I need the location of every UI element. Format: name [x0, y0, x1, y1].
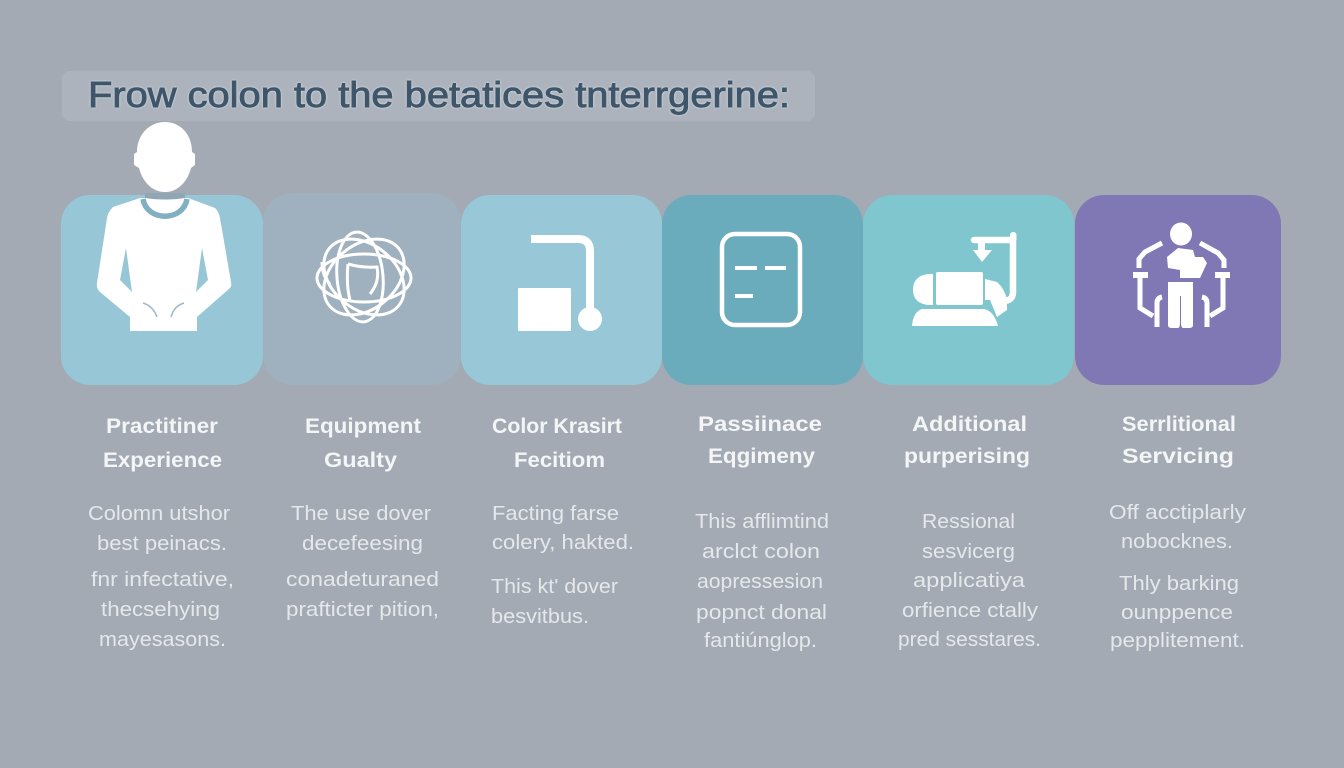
- text block: column 6 body: ounppence: [1121, 601, 1233, 624]
- icon: tube and box: [518, 239, 602, 331]
- text block: column 1 heading: [103, 414, 222, 472]
- text block: column 2 body: [286, 502, 439, 621]
- text block: column 1 body: Colomn utshor: [88, 502, 230, 525]
- card 1: [61, 195, 263, 385]
- card 6: [1075, 195, 1281, 385]
- text block: column 4 heading: Passiinace: [698, 412, 822, 436]
- panel: equipment quality: [263, 193, 461, 385]
- text block: column 4 heading: [698, 412, 822, 468]
- text block: column 3 body: Facting farse: [492, 502, 619, 525]
- text block: column 3 heading: Fecitiom: [514, 448, 605, 472]
- text block: column 2 body: decefeesing: [302, 532, 423, 555]
- text block: column 4 body: This afflimtind: [695, 510, 829, 533]
- text block: column 1 body: best peinacs.: [97, 532, 227, 555]
- title: [62, 71, 815, 121]
- panel: additional purperising: [863, 195, 1074, 385]
- icon: person with brackets: [1133, 222, 1230, 328]
- icon: tablet: [722, 234, 800, 325]
- card 3: [461, 195, 662, 385]
- text block: column 4 body: fantiúnglop.: [704, 629, 817, 652]
- text block: column 2 heading: Gualty: [324, 448, 397, 472]
- text block: column 6 body: Thly barking: [1119, 572, 1239, 595]
- text block: column 4 heading: Eqgimeny: [708, 444, 815, 468]
- text block: column 1 body: mayesasons.: [99, 628, 226, 651]
- panel: practitioner experience: [61, 122, 263, 385]
- text block: column 5 heading: Additional: [912, 412, 1027, 436]
- title: Frow colon to the betatices tnterrgerine:: [88, 74, 790, 115]
- text block: column 4 body: [695, 510, 829, 652]
- panel: serrlitional servicing: [1075, 195, 1281, 385]
- text block: column 1 heading: Practitiner: [106, 414, 219, 438]
- card 4: [662, 195, 863, 385]
- text block: column 6 body: nobocknes.: [1121, 530, 1233, 553]
- text block: column 4 body: aopressesion: [697, 570, 823, 593]
- panel: color krasirt fecitiom: [461, 195, 662, 385]
- text block: column 5 heading: [904, 412, 1030, 468]
- icon: globe: [309, 224, 419, 330]
- text block: column 4 body: arclct colon: [702, 540, 820, 563]
- text block: column 5 body: pred sesstares.: [898, 628, 1041, 651]
- text block: column 1 body: thecsehying: [101, 598, 220, 621]
- text block: column 5 body: orfience ctally: [902, 599, 1039, 622]
- text block: column 3 body: colery, hakted.: [492, 531, 634, 554]
- text block: column 5 body: applicatiya: [913, 569, 1026, 592]
- text block: column 1 heading: Experience: [103, 448, 222, 472]
- text block: column 6 heading: Serrlitional: [1122, 412, 1236, 436]
- text block: column 1 body: fnr infectative,: [91, 568, 234, 591]
- panel: passiinace eqgimeny: [662, 195, 863, 385]
- card 2: [263, 193, 461, 385]
- text block: column 1 body: [88, 502, 234, 651]
- text block: column 3 heading: [492, 414, 622, 472]
- text block: column 5 body: [898, 510, 1041, 651]
- text block: column 5 body: sesvicerg: [922, 540, 1015, 563]
- text block: column 5 body: Ressional: [922, 510, 1015, 533]
- text block: column 2 body: conadeturaned: [286, 568, 439, 591]
- card 5: [863, 195, 1074, 385]
- icon: machine: [912, 232, 1016, 326]
- text block: column 6 heading: Servicing: [1122, 444, 1234, 468]
- text block: column 6 body: Off acctiplarly: [1109, 501, 1247, 524]
- text block: column 5 heading: purperising: [904, 444, 1030, 468]
- text block: column 2 body: prafticter pition,: [286, 598, 439, 621]
- text block: column 4 body: popnct donal: [696, 601, 827, 624]
- text block: column 6 body: [1109, 501, 1247, 652]
- text block: column 3 body: besvitbus.: [491, 605, 589, 628]
- text block: column 2 heading: [305, 414, 421, 472]
- text block: column 6 heading: [1122, 412, 1236, 468]
- text block: column 2 body: The use dover: [291, 502, 431, 525]
- text block: column 2 heading: Equipment: [305, 414, 421, 438]
- text block: column 3 body: This kt' dover: [491, 575, 618, 598]
- text block: column 6 body: pepplitement.: [1110, 629, 1245, 652]
- text block: column 3 heading: Color Krasirt: [492, 414, 622, 438]
- text block: column 3 body: [491, 502, 634, 628]
- icon: person: [97, 122, 231, 331]
